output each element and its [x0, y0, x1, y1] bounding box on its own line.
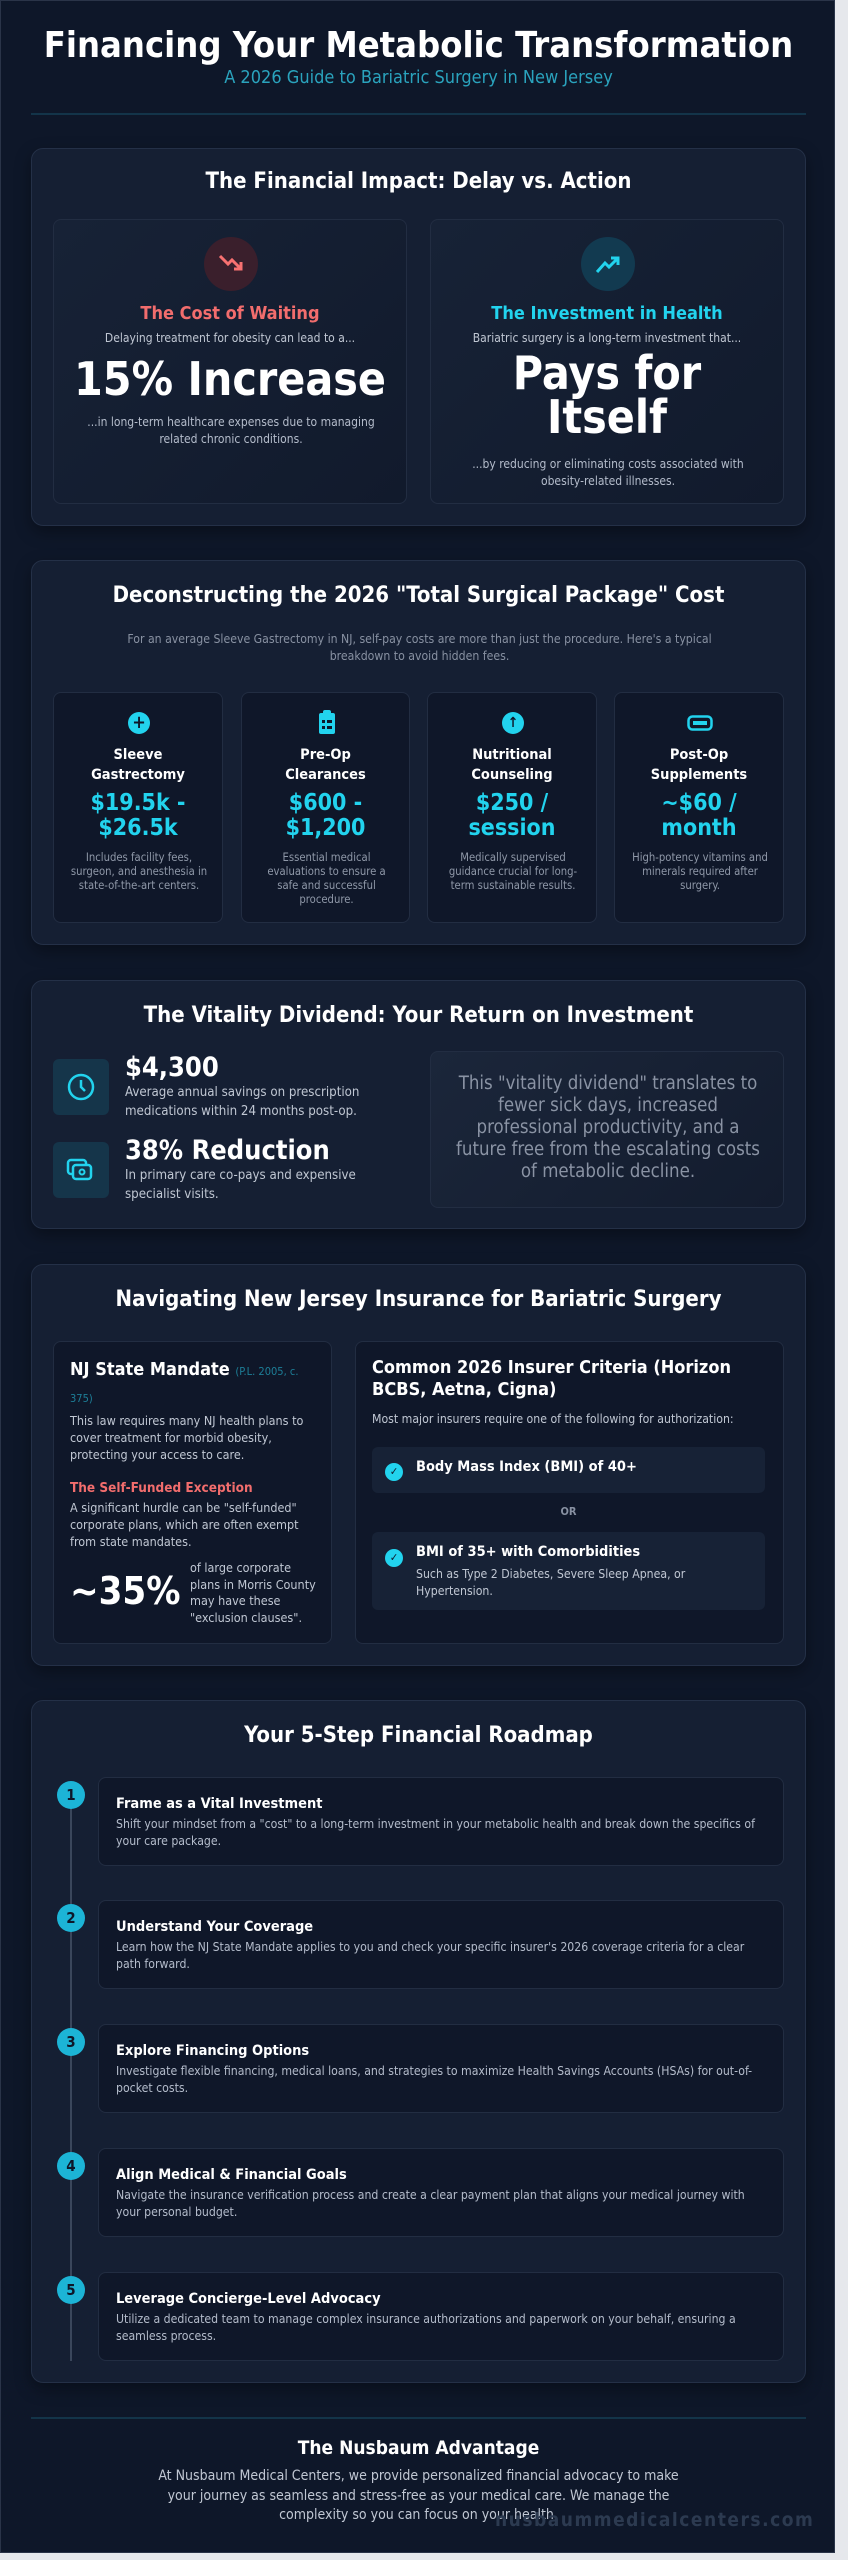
card: NJ state mandate: NJ State Mandate (P.L. 2005, c. 375) — [70, 1359, 298, 1405]
panel: roadmap: 3 — [66, 2033, 76, 2051]
title: Financing Your Metabolic Transformation — [44, 25, 793, 66]
step 1: Shift your mindset from a "cost" to a long-term investment in your metabolic health and break down the specifics of your care package. — [116, 1817, 755, 1848]
stat — [513, 346, 702, 444]
step 2: Understand Your Coverage — [116, 1919, 313, 1935]
cost card: pre-op: $1,200 — [286, 815, 365, 841]
cost card: pre-op: Essential medical evaluations to ensure a safe and successful procedure. — [267, 851, 386, 906]
card title: The Cost of Waiting — [140, 303, 320, 324]
panel: roadmap: 4 — [66, 2157, 76, 2175]
card: investment in health: ...by reducing or eliminating costs associated with obesity-related illnesses. — [472, 457, 744, 488]
card: insurer criteria: OR — [560, 1505, 577, 1518]
callout — [430, 1051, 784, 1208]
footer: Nusbaum advantage: The Nusbaum Advantage — [298, 2437, 539, 2459]
footer: Nusbaum advantage — [158, 2437, 679, 2523]
icon: plus circle — [128, 712, 150, 734]
step 3: Explore Financing Options — [116, 2043, 309, 2059]
panel: surgical package cost — [31, 560, 806, 945]
icon: pill — [687, 715, 713, 731]
panel: roadmap: 2 — [66, 1909, 76, 1927]
cost card: supplements: High-potency vitamins and minerals required after surgery. — [632, 851, 768, 892]
criterion: BMI 35 — [372, 1532, 765, 1610]
stat: Pays for — [513, 346, 701, 400]
card: cost of waiting: Delaying treatment for obesity can lead to a... — [105, 331, 355, 345]
cost card: pre-op — [241, 692, 410, 923]
step 3: Investigate flexible financing, medical loans, and strategies to maximize Health Savings Accounts (HSAs) for out-of-pocket costs. — [116, 2064, 752, 2095]
stat: 35%: ~35% — [70, 1569, 180, 1613]
card: cost of waiting — [53, 219, 407, 504]
step 1 — [98, 1777, 784, 1866]
step 4 — [98, 2148, 784, 2237]
icon: arrow circle: ↑ — [508, 715, 518, 731]
icon: trending up — [581, 237, 635, 291]
cost card: sleeve: Includes facility fees, surgeon, and anesthesia in state-of-the-art centers. — [71, 851, 207, 892]
step 3 — [98, 2024, 784, 2113]
card: insurer criteria: Common 2026 Insurer Criteria (Horizon BCBS, Aetna, Cigna) — [372, 1357, 731, 1400]
step 4: Navigate the insurance verification process and create a clear payment plan that aligns your medical journey with your personal budget. — [116, 2188, 745, 2219]
heading: The Financial Impact: Delay vs. Action — [206, 169, 631, 194]
cost card: sleeve: $26.5k — [98, 815, 178, 841]
icon: trending down — [204, 237, 258, 291]
icon: clipboard — [319, 710, 335, 734]
icon: arrow circle — [502, 712, 524, 734]
card: cost of waiting: ...in long-term healthcare expenses due to managing related chronic conditions. — [87, 415, 375, 446]
cost card: supplements: ~$60 / — [661, 790, 737, 816]
cost card: nutrition: Nutritional — [472, 747, 552, 763]
stat: Itself — [547, 390, 667, 444]
icon: clock — [53, 1059, 109, 1115]
card: NJ state mandate — [53, 1341, 332, 1644]
panel: roadmap — [31, 1700, 806, 2383]
card: insurer criteria — [355, 1341, 784, 1644]
cost card: sleeve: $19.5k - — [90, 790, 186, 816]
panel: roadmap: 1 — [66, 1786, 76, 1804]
cost card: pre-op: Pre-Op — [300, 747, 351, 763]
cost card: nutrition: session — [468, 815, 556, 841]
criterion: BMI 35: ✓ — [390, 1551, 398, 1564]
exception heading: The Self-Funded Exception — [70, 1480, 253, 1496]
step 5: Utilize a dedicated team to manage complex insurance authorizations and paperwork on your behalf, ensuring a seamless process. — [116, 2312, 736, 2343]
step 2: Learn how the NJ State Mandate applies to you and check your specific insurer's 2026 coverage criteria for a clear path forward. — [116, 1940, 744, 1971]
criterion: BMI 35: BMI of 35+ with Comorbidities — [416, 1544, 640, 1560]
criterion: BMI 40: ✓ — [390, 1465, 398, 1478]
step 1: Frame as a Vital Investment — [116, 1796, 322, 1812]
heading: Navigating New Jersey Insurance for Bariatric Surgery — [116, 1287, 722, 1312]
footer: Nusbaum advantage: At Nusbaum Medical Centers, we provide personalized financial advocacy to make your journey as seamless and stress-free as your medical care. We manage the complexity so you can focus on your health. — [158, 2468, 679, 2523]
card: investment in health — [430, 219, 784, 504]
callout: This "vitality dividend" translates to fewer sick days, increased professional productivity, and a future free from the escalating costs of metabolic decline. — [456, 1073, 760, 1182]
stat: reduction: In primary care co-pays and expensive specialist visits. — [125, 1168, 356, 1202]
stat: reduction — [53, 1135, 356, 1202]
card: insurer criteria: Most major insurers require one of the following for authorization: — [372, 1412, 734, 1426]
stat: savings: $4,300 — [125, 1052, 219, 1083]
step 5: Leverage Concierge-Level Advocacy — [116, 2291, 381, 2307]
cost card: pre-op: Clearances — [285, 767, 366, 783]
card: NJ state mandate: This law requires many NJ health plans to cover treatment for morbid obesity, protecting your access to care. — [70, 1413, 303, 1462]
watermark: nusbaummedicalcenters.com — [495, 2509, 814, 2531]
heading: The Vitality Dividend: Your Return on Investment — [144, 1003, 693, 1028]
stat: savings — [53, 1052, 359, 1119]
cost card: pre-op: $600 - — [289, 790, 362, 816]
icon: plus circle: + — [132, 712, 146, 733]
cost card: supplements: Post-Op — [670, 747, 728, 763]
card title: The Investment in Health — [491, 303, 723, 324]
card: NJ state mandate: A significant hurdle can be "self-funded" corporate plans, which are often exempt from state mandates. — [70, 1500, 298, 1549]
stat: savings: Average annual savings on prescription medications within 24 months post-op. — [125, 1085, 359, 1119]
cost card: nutrition — [427, 692, 597, 923]
icon: money — [53, 1142, 109, 1198]
cost card: nutrition: Counseling — [471, 767, 553, 783]
step 2 — [98, 1900, 784, 1989]
criterion: BMI 40: Body Mass Index (BMI) of 40+ — [416, 1459, 637, 1475]
step 5 — [98, 2272, 784, 2361]
subtitle: A 2026 Guide to Bariatric Surgery in New Jersey — [224, 67, 613, 88]
card: investment in health: Bariatric surgery is a long-term investment that... — [473, 331, 741, 345]
cost card: nutrition: Medically supervised guidance crucial for long-term sustainable results. — [449, 851, 577, 892]
intro text: For an average Sleeve Gastrectomy in NJ, self-pay costs are more than just the procedure. Here's a typical breakdown to avoid hidden fees. — [127, 632, 712, 663]
card: NJ state mandate: of large corporate plans in Morris County may have these "exclusion clauses". — [190, 1560, 316, 1624]
step 4: Align Medical & Financial Goals — [116, 2167, 347, 2183]
panel: insurance — [31, 1264, 806, 1666]
cost card: sleeve: Sleeve — [114, 747, 162, 763]
cost card: sleeve: Gastrectomy — [91, 767, 185, 783]
cost card: supplements: month — [661, 815, 737, 841]
panel: financial impact — [31, 148, 806, 526]
panel: roadmap: 5 — [66, 2281, 76, 2299]
cost card: nutrition: $250 / — [476, 790, 548, 816]
criterion: BMI 40 — [372, 1447, 765, 1493]
cost card: supplements — [614, 692, 784, 923]
heading: Deconstructing the 2026 "Total Surgical Package" Cost — [113, 583, 724, 608]
stat: 15% Increase — [74, 352, 386, 406]
criterion: BMI 35: Such as Type 2 Diabetes, Severe Sleep Apnea, or Hypertension. — [416, 1567, 685, 1598]
cost card: sleeve — [53, 692, 223, 923]
heading: Your 5-Step Financial Roadmap — [244, 1723, 593, 1748]
stat: reduction: 38% Reduction — [125, 1135, 330, 1166]
panel: vitality dividend — [31, 980, 806, 1229]
cost card: supplements: Supplements — [651, 767, 747, 783]
